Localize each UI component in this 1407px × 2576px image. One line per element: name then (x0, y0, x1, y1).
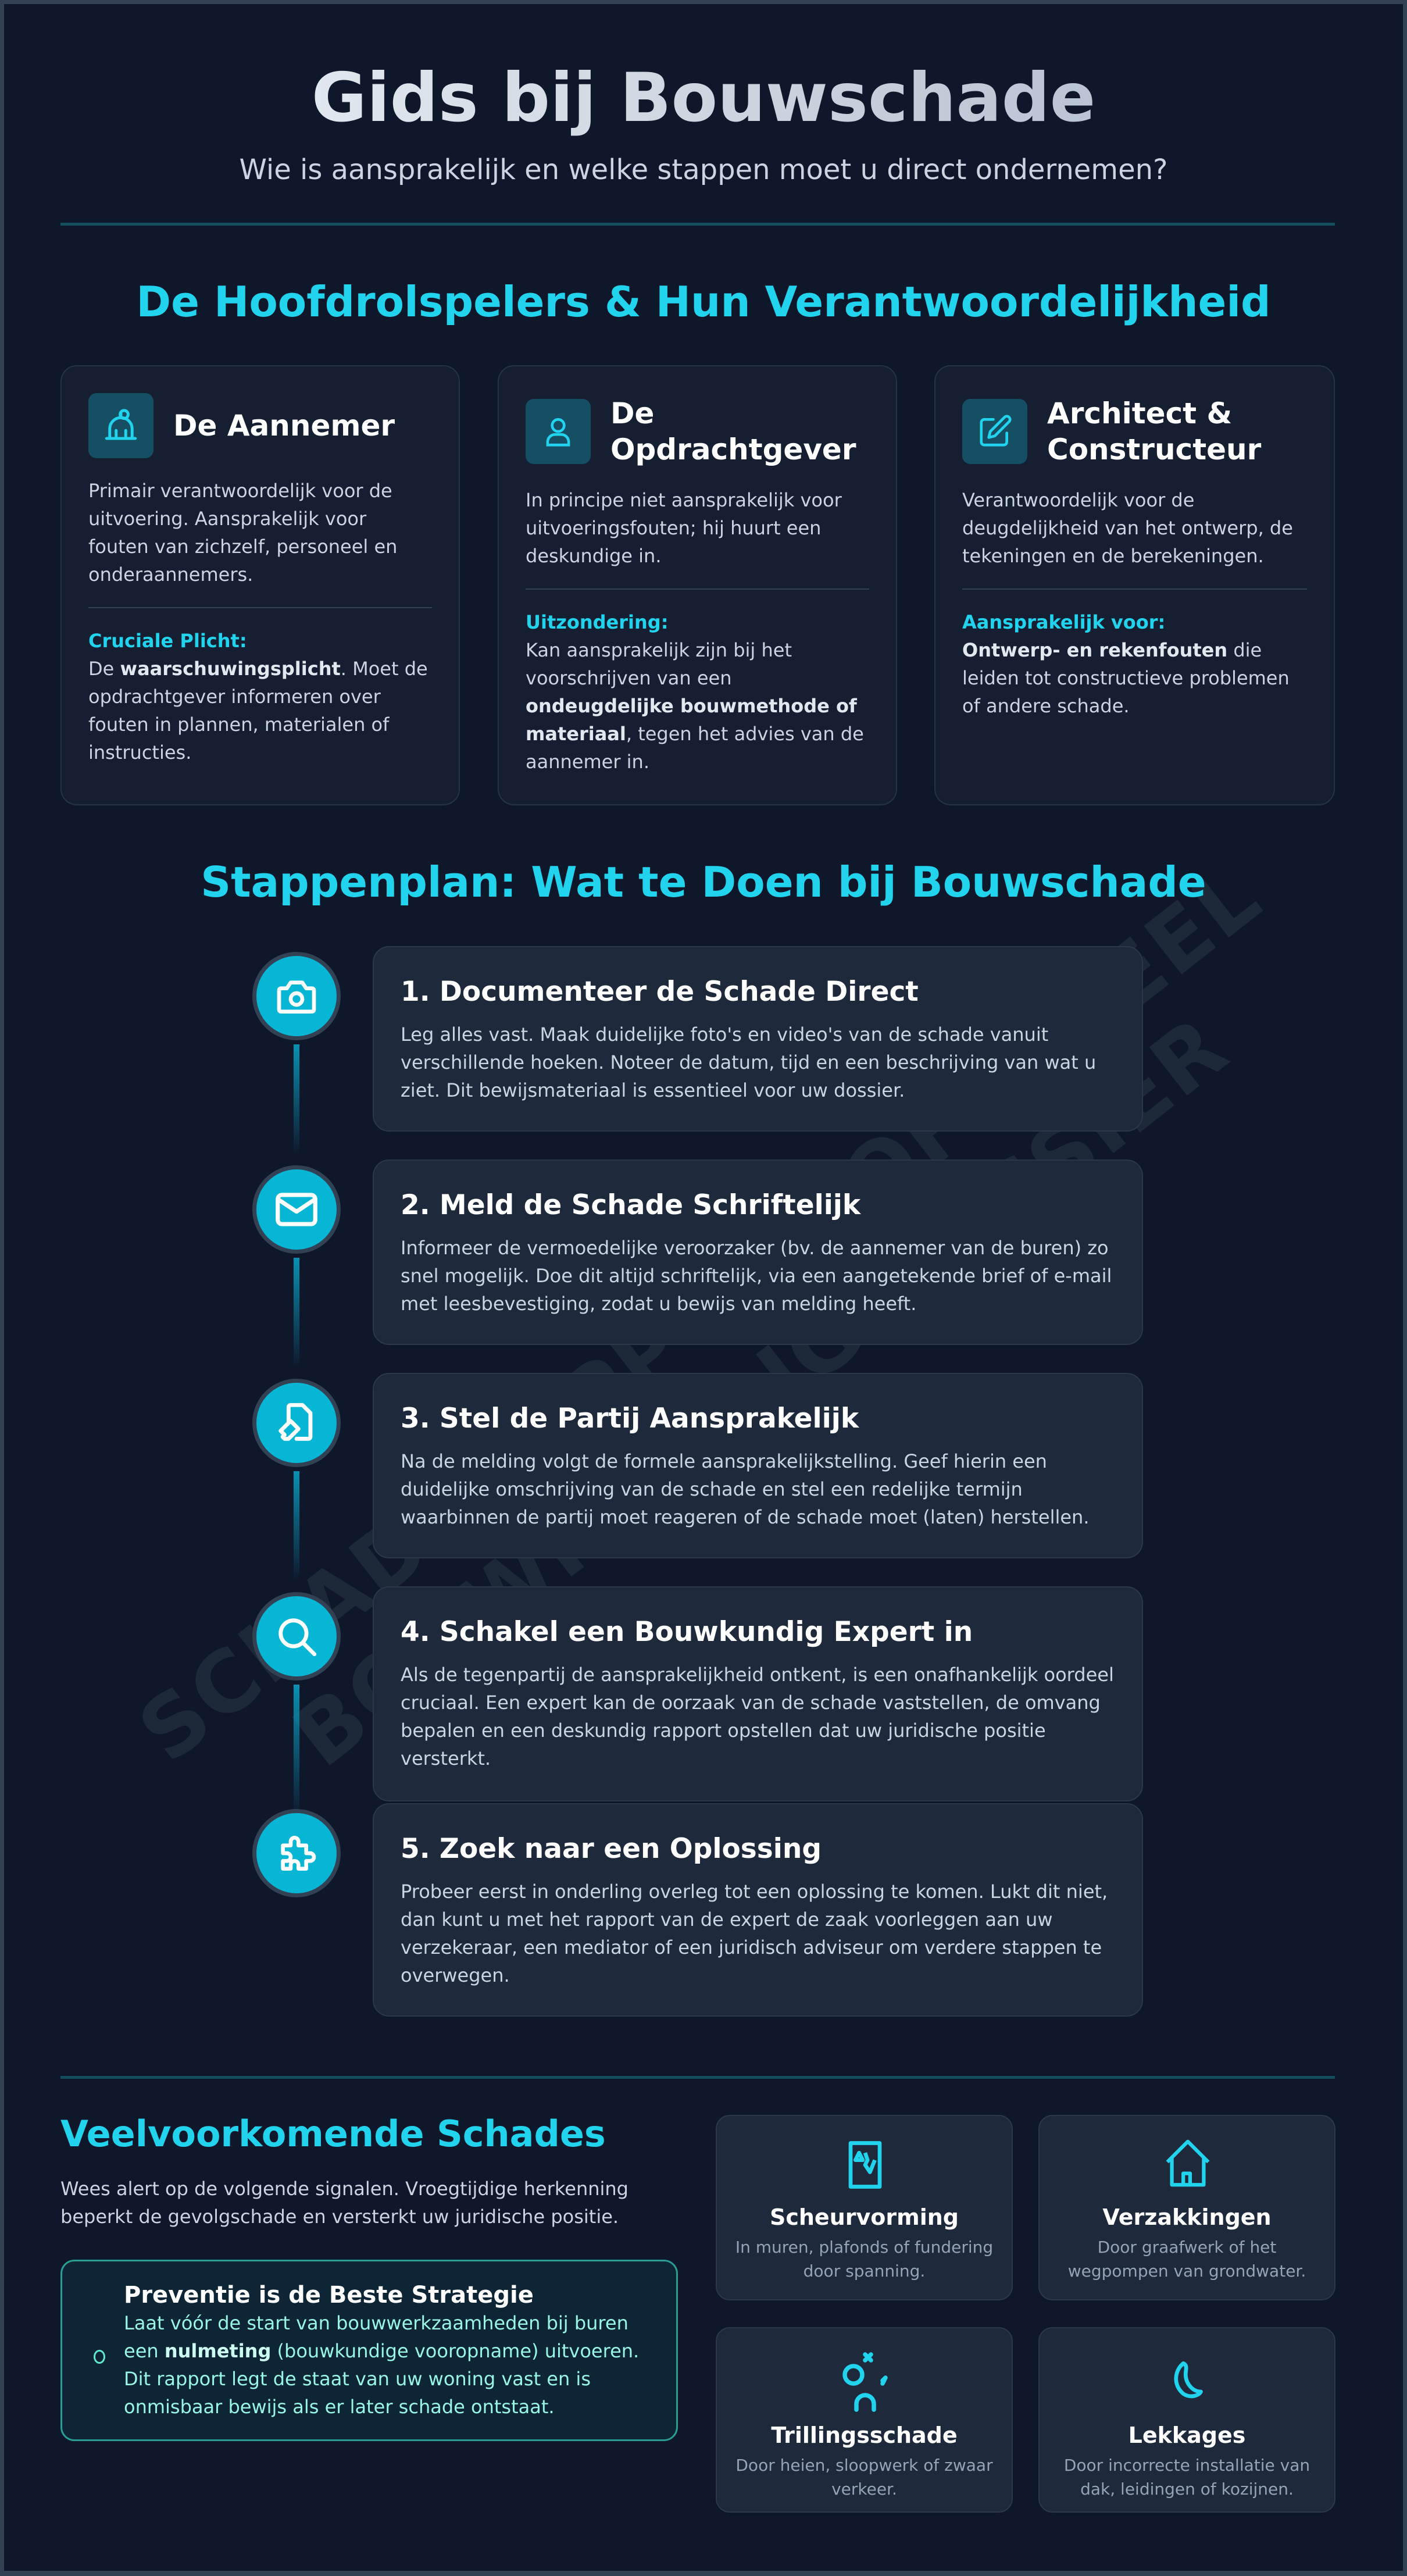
callout: preventie: Preventie is de Beste Strategie (124, 2282, 534, 2309)
title (4, 58, 1403, 139)
icon: persoon (526, 399, 591, 464)
icon: info (94, 2350, 105, 2364)
panel: de aannemer (60, 365, 460, 805)
icon: drop (1174, 2361, 1203, 2398)
panel: architect: Architect & (1047, 397, 1232, 430)
panel: architect (934, 365, 1335, 805)
step 5: 5. Zoek naar een Oplossing (401, 1833, 822, 1865)
step 4: 4. Schakel een Bouwkundig Expert in (401, 1616, 973, 1648)
panel: de aannemer: De Aannemer (173, 409, 395, 443)
timeline connectors (294, 1044, 299, 1809)
icon: mail (252, 1165, 341, 1254)
subtitle: Wie is aansprakelijk en welke stappen moet u direct ondernemen? (239, 154, 1167, 186)
icon: house (1166, 2140, 1209, 2186)
card: trillingsschade (716, 2327, 1013, 2513)
card: trillingsschade: Door heien, sloopwerk of zwaar verkeer. (735, 2456, 993, 2499)
icon: crack (849, 2141, 881, 2189)
callout: preventie (60, 2260, 678, 2441)
title: Gids bij Bouwschade (312, 59, 1095, 137)
intro text: Wees alert op de volgende signalen. Vroegtijdige herkenning beperkt de gevolgschade en versterkt uw juridische positie. (60, 2178, 628, 2228)
panel: de opdrachtgever: Opdrachtgever (610, 433, 856, 466)
panel: architect: Verantwoordelijk voor de deugdelijkheid van het ontwerp, de tekeningen en de berekeningen. (962, 489, 1293, 567)
step 1: 1. Documenteer de Schade Direct (401, 976, 919, 1008)
step 3 (373, 1373, 1143, 1558)
callout: preventie: Laat vóór de start van bouwwerkzaamheden bij buren een nulmeting (bouwkundige vooropname) uitvoeren. Dit rapport legt de staat van uw woning vast en is onmisbaar bewijs als er later schade ontstaat. (124, 2312, 639, 2418)
panel: de aannemer: Cruciale Plicht: (88, 630, 247, 652)
panel: de opdrachtgever: De (610, 397, 654, 430)
step 4 (373, 1586, 1143, 1801)
step 4: Als de tegenpartij de aansprakelijkheid ontkent, is een onafhankelijk oordeel cruciaal. Een expert kan de oorzaak van de schade vaststellen, de omvang bepalen en een deskundig rapport opstellen dat uw juridische positie versterkt. (401, 1664, 1114, 1769)
heading: hoofdrolspelers: De Hoofdrolspelers & Hun Verantwoordelijkheid (136, 277, 1271, 326)
panel: de opdrachtgever (498, 365, 897, 805)
card: lekkages: Lekkages (1129, 2422, 1245, 2448)
step 2 (373, 1159, 1143, 1345)
step 2: 2. Meld de Schade Schriftelijk (401, 1189, 860, 1221)
card: verzakkingen: Door graafwerk of het wegpompen van grondwater. (1068, 2238, 1306, 2281)
icon: vibration (842, 2352, 888, 2412)
panel: architect: Aansprakelijk voor: (962, 611, 1165, 633)
card: scheurvorming: In muren, plafonds of fundering door spanning. (735, 2238, 993, 2281)
step 1 (373, 946, 1143, 1132)
card: scheurvorming: Scheurvorming (770, 2204, 959, 2230)
icon: search (252, 1592, 341, 1681)
watermark: BOUWKUNDIG DOSSIER (276, 997, 1247, 1786)
card: scheurvorming (716, 2115, 1013, 2300)
step 3: Na de melding volgt de formele aansprakelijkstelling. Geef hierin een duidelijke omschrijving van de schade en stel een redelijke termijn waarbinnen de partij moet reageren of de schade moet (laten) herstellen. (401, 1450, 1089, 1528)
panel: de aannemer: De waarschuwingsplicht. Moet de opdrachtgever informeren over fouten in plannen, materialen of instructies. (88, 658, 428, 763)
card: verzakkingen (1038, 2115, 1335, 2300)
panel: architect: Ontwerp- en rekenfouten die leiden tot constructieve problemen of andere schade. (962, 639, 1290, 717)
heading: veelvoorkomende schades: Veelvoorkomende Schades (60, 2113, 606, 2155)
panel: de opdrachtgever: Kan aansprakelijk zijn bij het voorschrijven van een ondeugdelijke bouwmethode of materiaal, tegen het advies van de aannemer in. (526, 639, 864, 773)
panel: de opdrachtgever: In principe niet aansprakelijk voor uitvoeringsfouten; hij huurt een deskundige in. (526, 489, 842, 567)
panel: architect: Constructeur (1047, 433, 1261, 466)
panel: de aannemer: Primair verantwoordelijk voor de uitvoering. Aansprakelijk voor fouten van zichzelf, personeel en onderaannemers. (88, 480, 397, 586)
panel: de opdrachtgever: Uitzondering: (526, 611, 668, 633)
step 5 (373, 1803, 1143, 2017)
card: lekkages (1038, 2327, 1335, 2513)
card: lekkages: Door incorrecte installatie van dak, leidingen of kozijnen. (1064, 2456, 1310, 2499)
watermark: SCHADERAPPORT OFFICIEEL (121, 846, 1280, 1782)
heading: stappenplan: Stappenplan: Wat te Doen bij Bouwschade (201, 858, 1206, 907)
icon: puzzle (252, 1809, 341, 1897)
step 3: 3. Stel de Partij Aansprakelijk (401, 1403, 859, 1435)
step 5: Probeer eerst in onderling overleg tot een oplossing te komen. Lukt dit niet, dan kunt u met het rapport van de expert de zaak voorleggen aan uw verzekeraar, een mediator of een juridisch adviseur om verdere stappen te overwegen. (401, 1881, 1108, 1986)
icon: camera (252, 952, 341, 1040)
icon: aannemer (88, 393, 153, 458)
step 2: Informeer de vermoedelijke veroorzaker (bv. de aannemer van de buren) zo snel mogelijk. Doe dit altijd schriftelijk, via een aangetekende brief of e-mail met leesbevestiging, zodat u bewijs van melding heeft. (401, 1237, 1112, 1315)
step 1: Leg alles vast. Maak duidelijke foto's en video's van de schade vanuit verschillende hoeken. Noteer de datum, tijd en een beschrijving van wat u ziet. Dit bewijsmateriaal is essentieel voor uw dossier. (401, 1023, 1096, 1101)
icon: edit (962, 399, 1027, 464)
card: verzakkingen: Verzakkingen (1102, 2204, 1272, 2230)
card: trillingsschade: Trillingsschade (771, 2422, 958, 2448)
icon: document (252, 1379, 341, 1467)
